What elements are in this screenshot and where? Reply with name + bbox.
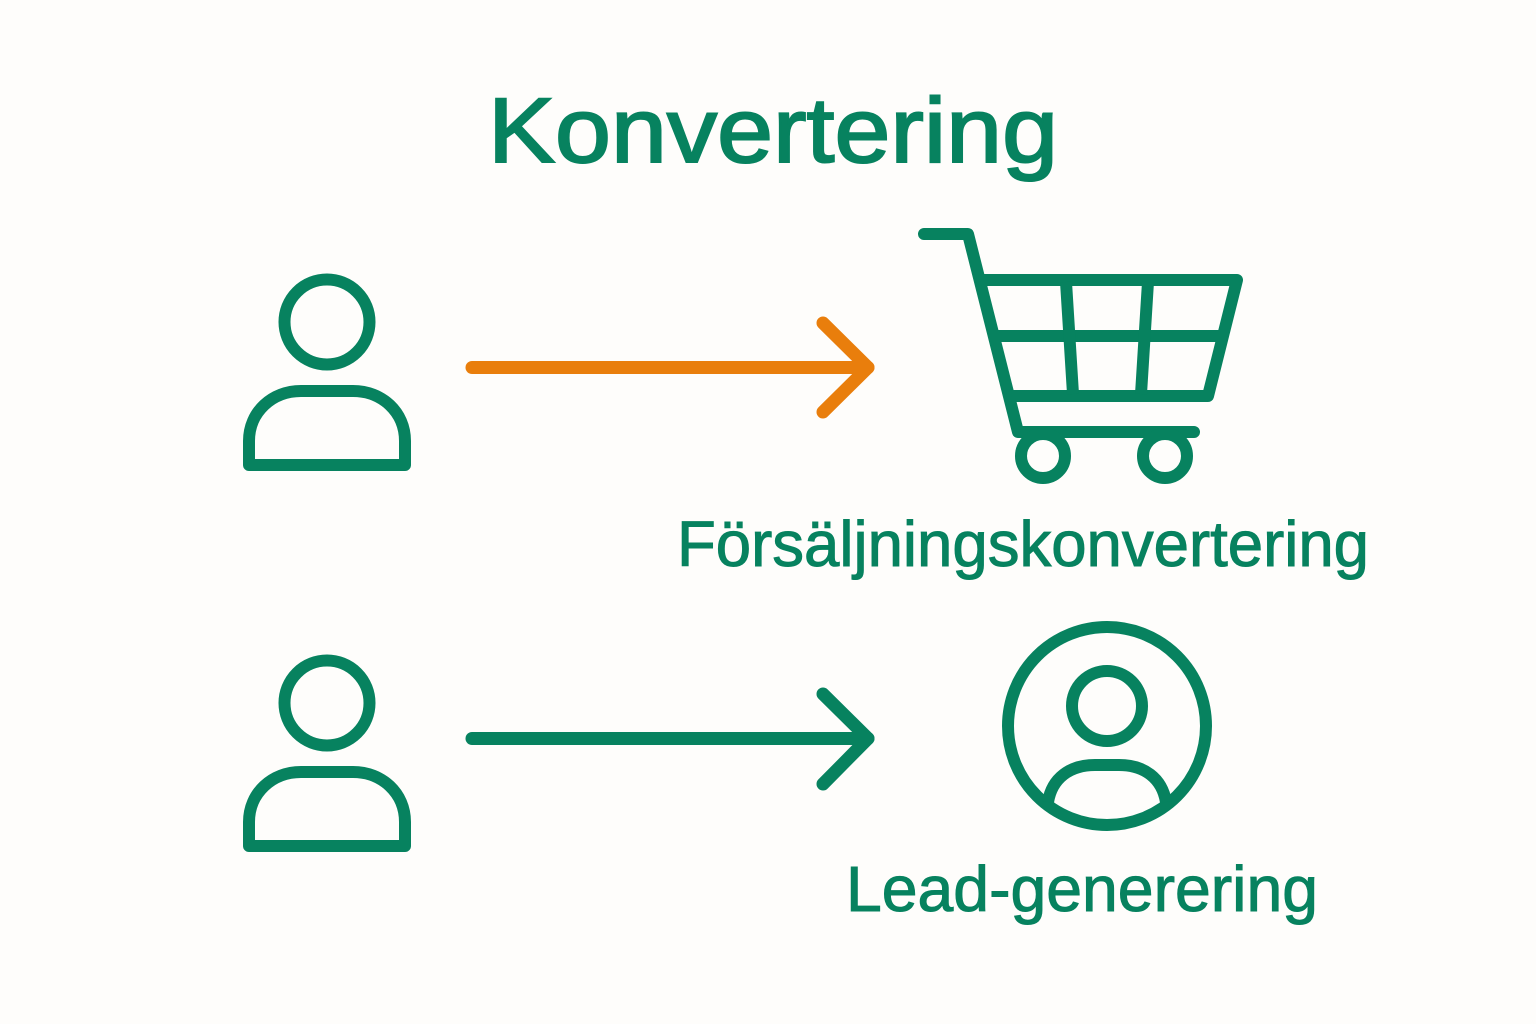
label: sales conversion: Försäljningskonvertering [677,508,1369,580]
title: Konvertering [488,80,1058,182]
icon: shopping cart [924,234,1237,478]
icon: person top [249,280,405,465]
arrow: green [472,694,868,784]
icon: person bottom [249,660,405,846]
arrow: orange [472,323,868,412]
label: lead generation: Lead-generering [846,853,1318,925]
icon: lead profile [1008,627,1206,825]
